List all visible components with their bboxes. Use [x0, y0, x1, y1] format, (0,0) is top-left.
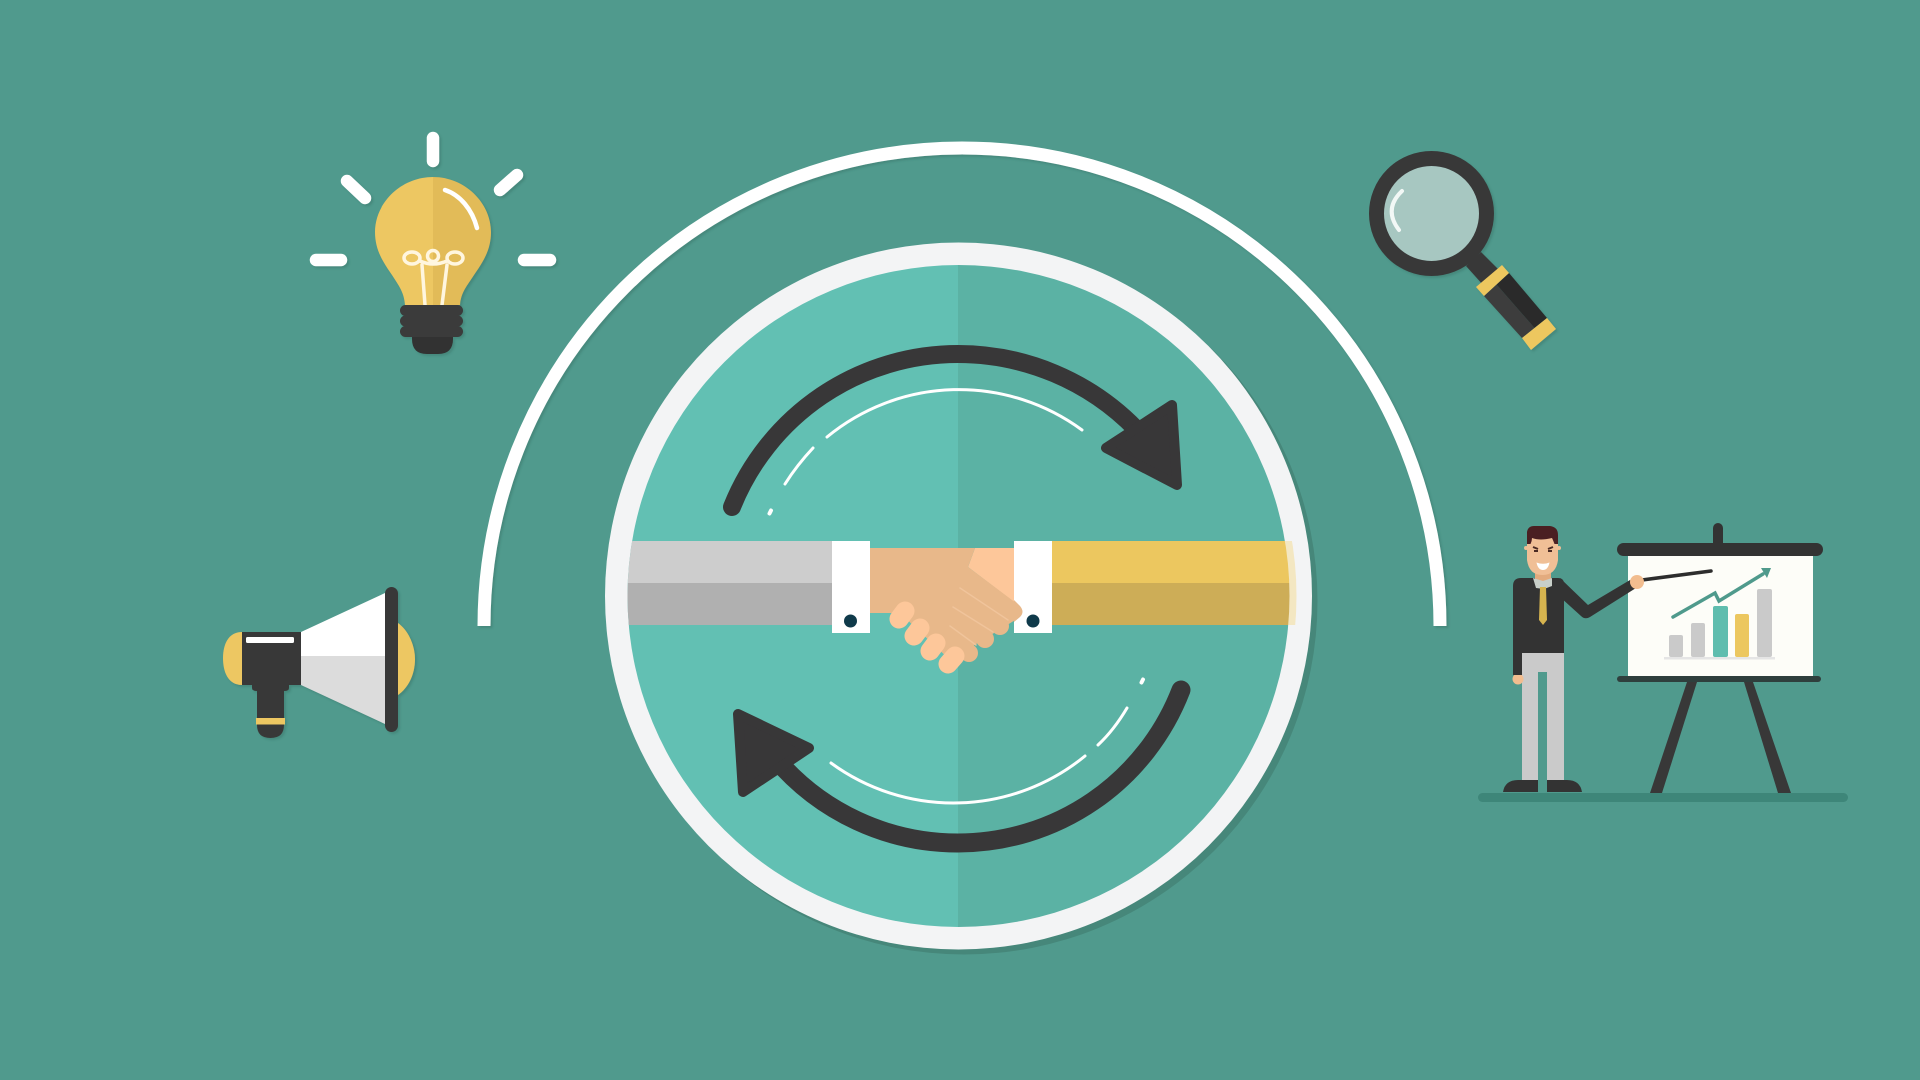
bulb rays: [316, 138, 550, 260]
bulb filament: [404, 250, 463, 305]
top circular arrow: [732, 354, 1177, 507]
magnifier ring: [1376, 158, 1486, 268]
icon: light bulb: [316, 138, 550, 354]
board sheet: [1628, 553, 1813, 678]
head: [1527, 535, 1558, 575]
megaphone body: [242, 632, 301, 685]
bulb screw base: [400, 305, 463, 354]
jacket torso: [1513, 578, 1564, 675]
central circle badge: [605, 242, 1318, 954]
right yellow sleeve: [1052, 541, 1310, 625]
circle two-tone fill: [620, 260, 1298, 940]
large white semicircle arc: [484, 148, 1440, 626]
fingers: [899, 611, 955, 664]
pointing hand: [1630, 575, 1644, 589]
infographic canvas: [223, 132, 1848, 954]
megaphone handle band: [256, 718, 285, 724]
board top bar: [1617, 543, 1823, 556]
left hand: [1512, 674, 1524, 684]
left hand and palm: [870, 548, 1022, 660]
board bottom bar: [1617, 676, 1821, 682]
icon: megaphone: [223, 587, 415, 738]
megaphone cone: [301, 593, 385, 656]
circle white ring: [605, 242, 1312, 950]
left grey sleeve: [620, 541, 832, 625]
ears: [1524, 546, 1528, 550]
bulb highlight: [445, 190, 477, 228]
megaphone rear cap: [223, 632, 242, 685]
pointing arm: [1560, 578, 1636, 618]
trend arrow: [1673, 568, 1771, 617]
board knob: [1713, 523, 1723, 551]
presenter figure: [1503, 526, 1711, 792]
icon: magnifying glass: [1376, 158, 1556, 350]
right hand back: [968, 548, 1014, 602]
megaphone handle: [252, 685, 289, 738]
megaphone highlight: [246, 637, 294, 643]
necktie: [1539, 587, 1547, 625]
bar chart: [1664, 589, 1775, 660]
magnifier glare: [1392, 191, 1402, 230]
smile: [1536, 562, 1550, 570]
trousers: [1522, 653, 1564, 780]
pointer stick: [1642, 571, 1711, 580]
finger creases: [950, 588, 1008, 645]
megaphone front rim: [385, 587, 398, 732]
left shirt cuff: [832, 541, 870, 633]
handshake: [870, 548, 1022, 664]
circle shadow: [610, 248, 1318, 954]
neck: [1535, 570, 1551, 582]
ground line: [1478, 793, 1848, 802]
hair: [1527, 526, 1558, 544]
magnifier stem: [1466, 252, 1499, 286]
magnifier handle bands: [1476, 265, 1509, 296]
shirt collar: [1533, 578, 1552, 589]
megaphone front dome: [398, 623, 415, 695]
eyes and brows: [1533, 547, 1553, 551]
right shirt cuff: [1014, 541, 1052, 633]
bottom circular arrow: [738, 690, 1181, 843]
magnifier handle: [1484, 284, 1534, 338]
easel legs: [1650, 682, 1791, 793]
top thin white arcs: [770, 390, 1082, 514]
bottom thin white arcs: [831, 680, 1143, 803]
bulb glass: [375, 177, 433, 305]
darker fingertips: [960, 617, 1009, 662]
shoes: [1503, 780, 1538, 792]
presentation board: [1617, 523, 1823, 793]
